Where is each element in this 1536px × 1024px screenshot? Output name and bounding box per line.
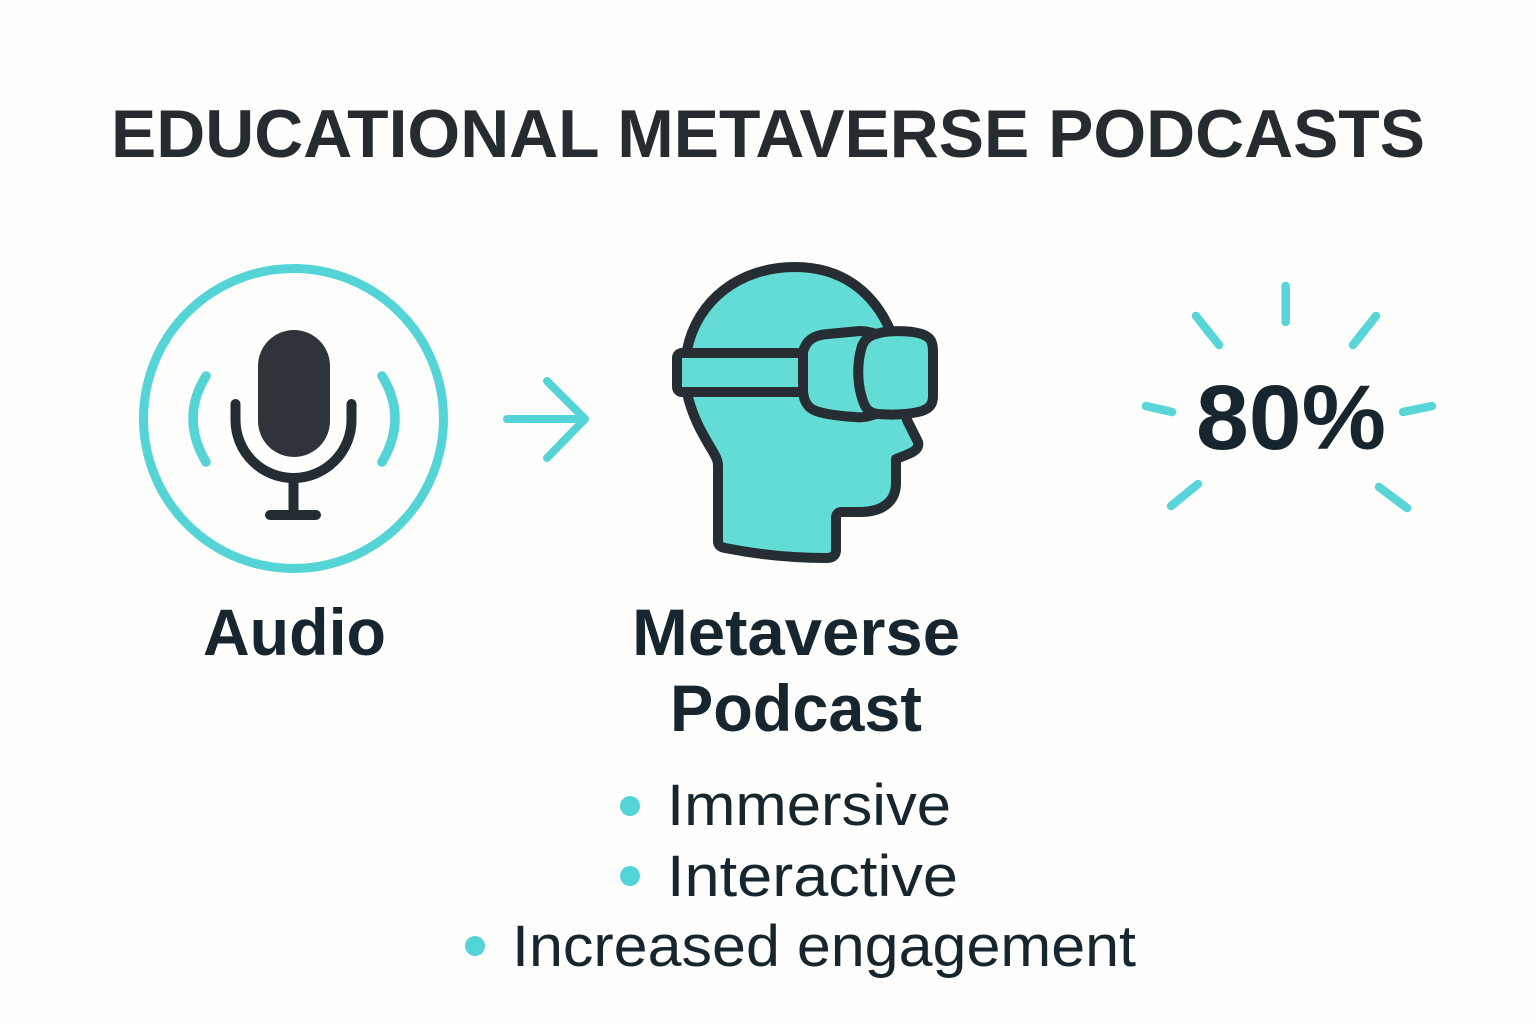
icon: head with VR headset: [677, 267, 933, 558]
microphone capsule: [258, 330, 330, 457]
bullet list: [465, 773, 1136, 979]
bullet: Interactive: Interactive: [667, 844, 958, 909]
microphone holder and stand: [236, 404, 352, 515]
sound waves: [193, 376, 395, 462]
headset front visor: [858, 331, 933, 415]
rays around statistic: [1146, 286, 1432, 508]
statistic: 80%: 80%: [1196, 367, 1386, 469]
bullet: Immersive: Immersive: [667, 773, 951, 838]
label: Metaverse Podcast: [632, 595, 960, 745]
label: Audio: Audio: [203, 595, 386, 669]
icon ring: [144, 268, 444, 568]
title: EDUCATIONAL METAVERSE PODCASTS: [111, 96, 1425, 172]
label: Metaverse Podcast: Podcast: [670, 671, 922, 745]
bullet: Increased engagement: Increased engagement: [512, 914, 1136, 979]
head: [687, 267, 918, 558]
icon: microphone in circle: [144, 268, 444, 568]
label: Metaverse Podcast: Metaverse: [632, 595, 960, 669]
arrow: [507, 381, 585, 458]
headset rear housing: [803, 331, 876, 417]
headset strap: [677, 353, 803, 392]
